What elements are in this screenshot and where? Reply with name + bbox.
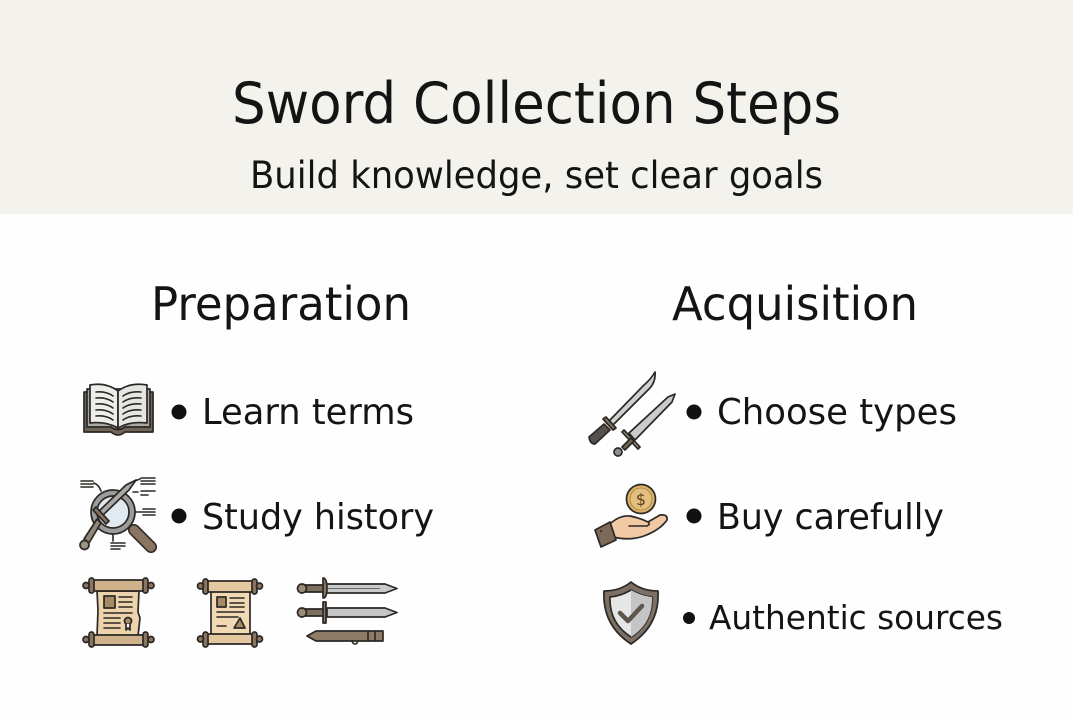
bullet: Choose types: [686, 404, 702, 420]
icon: hand with coin: $: [636, 490, 646, 509]
text: Study history: Study history: [202, 497, 434, 538]
icon: warning scroll: [198, 579, 262, 647]
header band: [0, 0, 1073, 214]
heading: Preparation: Preparation: [151, 277, 411, 331]
icon: swords and scabbard: [298, 578, 397, 644]
text: Authentic sources: Authentic sources: [709, 598, 1003, 637]
icon: open book: [84, 384, 153, 435]
bullet: Study history: [172, 508, 186, 524]
subtitle: Build knowledge, set clear goals: [250, 154, 823, 197]
icon: magnifier over sword: [80, 478, 155, 550]
bullet: Authentic sources: [683, 612, 695, 624]
icon: shield with check: [604, 582, 658, 644]
title: Sword Collection Steps: [232, 71, 841, 137]
icon: hand with coin: [595, 484, 667, 547]
text: Choose types: Choose types: [717, 392, 957, 433]
icon: two swords: [589, 372, 675, 456]
bullet: Learn terms: [172, 404, 186, 420]
icon: certificate scroll: [83, 578, 154, 647]
text: Buy carefully: Buy carefully: [717, 497, 944, 538]
bullet: Buy carefully: [686, 508, 702, 524]
text: Learn terms: Learn terms: [202, 392, 414, 433]
heading: Acquisition: Acquisition: [672, 277, 918, 331]
